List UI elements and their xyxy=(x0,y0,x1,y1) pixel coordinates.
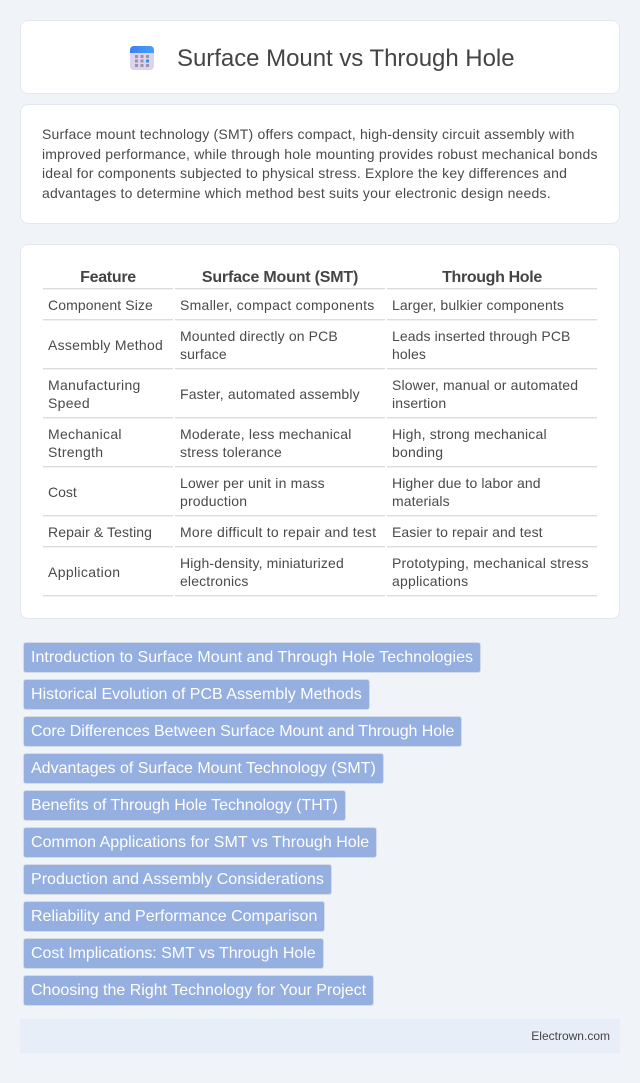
row: mechanical strength: Moderate, less mechanical xyxy=(180,426,352,442)
link button xyxy=(23,642,481,673)
row: mechanical strength xyxy=(48,426,547,460)
row: cost: Cost xyxy=(48,484,77,500)
comparison table xyxy=(43,269,597,597)
intro text xyxy=(42,126,598,201)
row: component size: Smaller, compact components xyxy=(180,297,375,313)
row: cost: Lower per unit in mass xyxy=(180,475,325,491)
footer xyxy=(20,1019,620,1053)
link button: Benefits of Through Hole Technology (THT) xyxy=(31,797,338,814)
row: cost: Higher due to labor and xyxy=(392,475,541,491)
link button: Historical Evolution of PCB Assembly Methods xyxy=(31,686,362,703)
row: assembly method: holes xyxy=(392,346,426,362)
footer: Electrown.com xyxy=(531,1029,610,1043)
link button: Introduction to Surface Mount and Through Hole Technologies xyxy=(31,649,473,666)
link button xyxy=(23,864,332,895)
row: repair and testing: Repair & Testing xyxy=(48,524,152,540)
row: application: Application xyxy=(48,564,120,580)
row: manufacturing speed: Slower, manual or automated xyxy=(392,377,578,393)
link button: Cost Implications: SMT vs Through Hole xyxy=(31,945,316,962)
link button xyxy=(23,938,324,969)
row: manufacturing speed: insertion xyxy=(392,395,446,411)
link button: Choosing the Right Technology for Your Project xyxy=(31,982,366,999)
row: cost: production xyxy=(180,493,247,509)
row: mechanical strength: bonding xyxy=(392,444,443,460)
link button: Common Applications for SMT vs Through Hole xyxy=(31,834,369,851)
row: assembly method: Leads inserted through PCB xyxy=(392,328,570,344)
row: cost xyxy=(48,475,541,509)
link button xyxy=(23,753,384,784)
link button xyxy=(23,716,462,747)
intro text: improved performance, while through hole mounting provides robust mechanical bonds xyxy=(42,146,598,162)
row: component size: Larger, bulkier components xyxy=(392,297,564,313)
link button: Reliability and Performance Comparison xyxy=(31,908,317,925)
row: assembly method: surface xyxy=(180,346,227,362)
row: manufacturing speed: Speed xyxy=(48,395,90,411)
table header: Surface Mount (SMT) xyxy=(202,269,358,286)
table header: Feature xyxy=(80,269,136,286)
link button: Production and Assembly Considerations xyxy=(31,871,324,888)
icon: calendar chip xyxy=(130,46,154,70)
row: repair and testing xyxy=(48,524,543,540)
row: cost: materials xyxy=(392,493,450,509)
table header: Through Hole xyxy=(442,269,542,286)
row: component size xyxy=(48,297,564,313)
intro text: ideal for components subjected to physical stress. Explore the key differences and xyxy=(42,165,567,181)
row: repair and testing: Easier to repair and test xyxy=(392,524,543,540)
row: mechanical strength: stress tolerance xyxy=(180,444,282,460)
row: application: High-density, miniaturized xyxy=(180,555,344,571)
row: assembly method: Mounted directly on PCB xyxy=(180,328,338,344)
row: application: electronics xyxy=(180,573,249,589)
title: Surface Mount vs Through Hole xyxy=(177,45,515,72)
link button xyxy=(23,827,377,858)
row: repair and testing: More difficult to repair and test xyxy=(180,524,376,540)
intro text: Surface mount technology (SMT) offers compact, high-density circuit assembly with xyxy=(42,126,575,142)
link button xyxy=(23,790,346,821)
row: application xyxy=(48,555,589,589)
intro text: advantages to determine which method best suits your electronic design needs. xyxy=(42,184,551,200)
row: manufacturing speed: Manufacturing xyxy=(48,377,141,393)
link button: Advantages of Surface Mount Technology (SMT) xyxy=(31,760,376,777)
link button xyxy=(23,679,370,710)
link button xyxy=(23,975,374,1006)
row: manufacturing speed xyxy=(48,377,578,411)
link button xyxy=(23,901,325,932)
intro panel xyxy=(20,104,620,224)
row: application: applications xyxy=(392,573,468,589)
row: component size: Component Size xyxy=(48,297,153,313)
row: assembly method: Assembly Method xyxy=(48,337,163,353)
row: manufacturing speed: Faster, automated assembly xyxy=(180,386,360,402)
comparison table panel xyxy=(20,244,620,619)
title panel xyxy=(20,20,620,94)
link button: Core Differences Between Surface Mount and Through Hole xyxy=(31,723,454,740)
row: mechanical strength: Strength xyxy=(48,444,103,460)
row: mechanical strength: Mechanical xyxy=(48,426,122,442)
row: mechanical strength: High, strong mechanical xyxy=(392,426,547,442)
row: assembly method xyxy=(48,328,570,362)
row: application: Prototyping, mechanical stress xyxy=(392,555,589,571)
table header xyxy=(80,269,542,286)
